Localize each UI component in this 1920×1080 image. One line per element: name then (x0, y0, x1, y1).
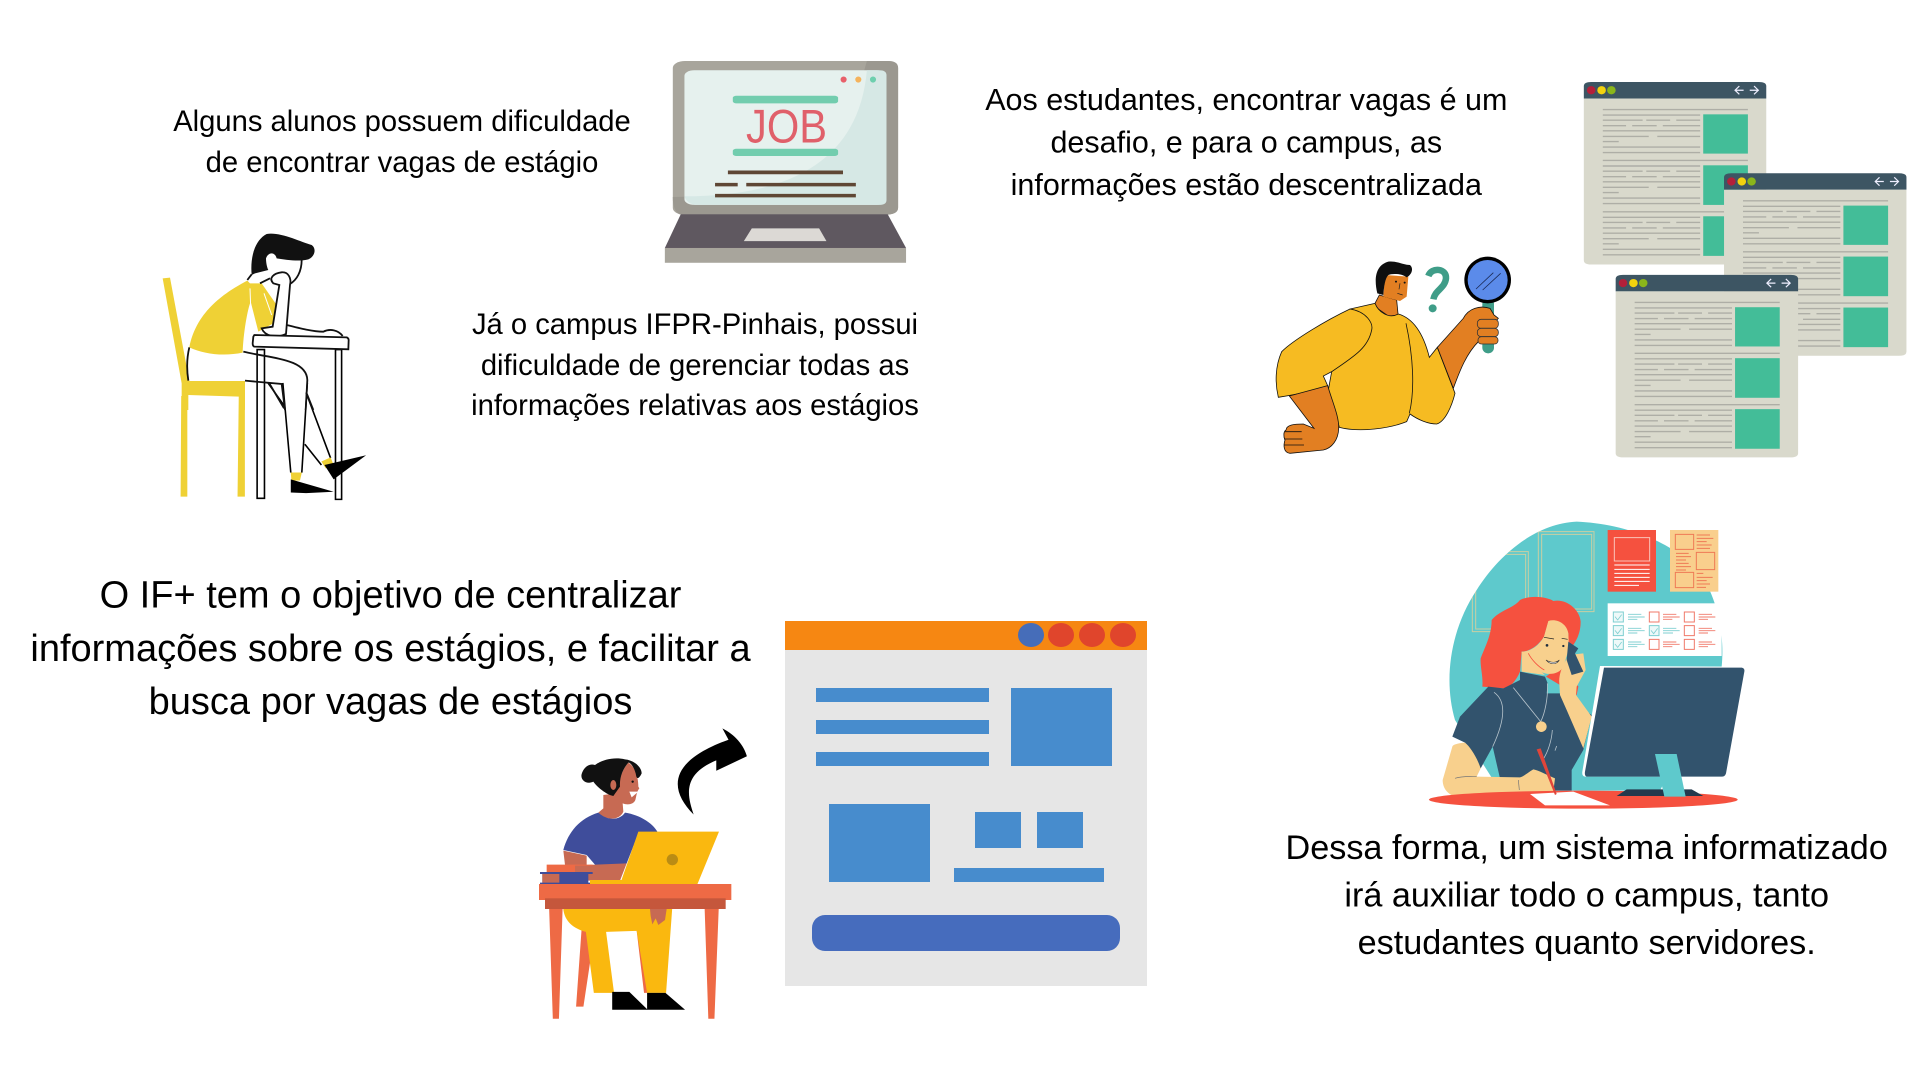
text: estudantes desafio: desafio, e para o campus, as (1050, 126, 1442, 160)
text: alunos dificuldade (173, 106, 631, 179)
heading: objetivo do IF+ (30, 574, 751, 723)
text: campus dificuldade: dificuldade de gerenciar todas as (481, 350, 909, 382)
heading: objetivo do IF+: busca por vagas de estágios (149, 681, 632, 723)
icon: woman with laptop at desk (539, 758, 731, 1019)
text: conclusao sistema informatizado: Dessa forma, um sistema informatizado (1286, 829, 1888, 867)
heading: objetivo do IF+: informações sobre os estágios, e facilitar a (30, 628, 751, 670)
panel header (785, 621, 1147, 650)
text: campus dificuldade: informações relativas aos estágios (471, 390, 919, 422)
text: estudantes desafio (985, 83, 1507, 202)
JOB lettering: JOB (746, 100, 827, 152)
icon: browser windows (1584, 82, 1906, 457)
text: conclusao sistema informatizado (1286, 829, 1888, 962)
text: campus dificuldade (471, 309, 919, 422)
heading: objetivo do IF+: O IF+ tem o objetivo de centralizar (100, 574, 682, 616)
icon: woman on phone at computer (1429, 522, 1744, 809)
panel button (812, 915, 1120, 951)
text: campus dificuldade: Já o campus IFPR-Pinhais, possui (472, 309, 918, 341)
text: estudantes desafio: Aos estudantes, encontrar vagas é um (985, 83, 1507, 117)
panel: website mockup (785, 621, 1147, 986)
text: conclusao sistema informatizado: estudantes quanto servidores. (1358, 924, 1816, 962)
text: conclusao sistema informatizado: irá auxiliar todo o campus, tanto (1344, 876, 1829, 914)
text: estudantes desafio: informações estão descentralizada (1011, 168, 1482, 202)
icon: curved arrow (678, 728, 747, 814)
icon: student at desk (163, 234, 366, 499)
text: alunos dificuldade: Alguns alunos possuem dificuldade (173, 106, 631, 138)
icon: man with magnifying glass (1276, 257, 1511, 453)
icon: laptop with job posting (665, 61, 906, 263)
text: alunos dificuldade: de encontrar vagas de estágio (206, 147, 598, 179)
